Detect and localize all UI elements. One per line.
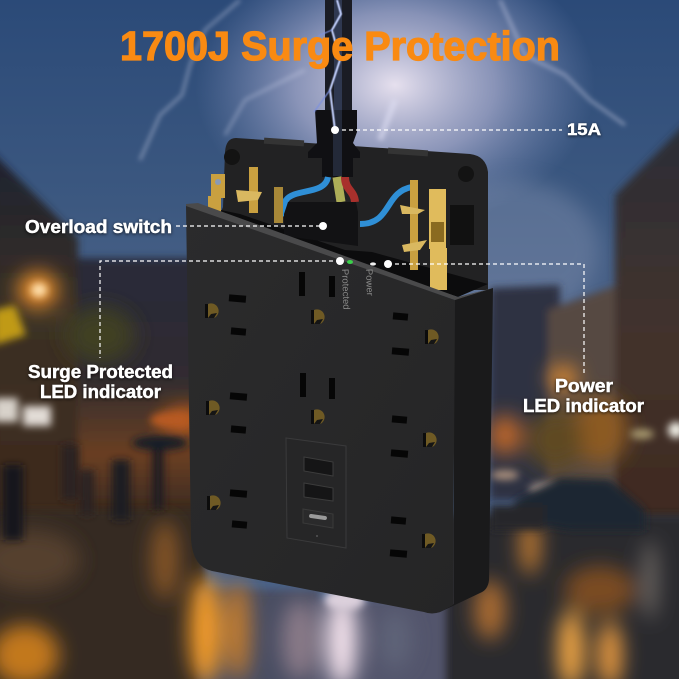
warm city lights and reflections <box>0 272 657 679</box>
callout: Surge Protected LED indicator: Surge Protected <box>28 362 173 382</box>
rear socket block <box>450 205 474 245</box>
USB-A port 2 <box>304 483 333 501</box>
main body: side face <box>438 288 493 613</box>
blurred buildings right <box>490 120 679 520</box>
power cord <box>308 0 360 177</box>
blurred buildings left <box>0 150 203 520</box>
right terminals <box>400 180 447 290</box>
callout: Overload switch <box>25 217 327 237</box>
callout: Power LED indicator: LED indicator <box>523 396 644 416</box>
white LED <box>370 262 376 266</box>
title: 1700J Surge Protection <box>120 23 560 69</box>
callout: Power LED indicator <box>384 260 644 416</box>
ground wire <box>337 177 341 202</box>
overload switch <box>284 202 358 246</box>
sky glow <box>195 0 595 230</box>
interior floor of the open housing <box>186 204 488 297</box>
switch wire <box>360 187 412 224</box>
callout: Power LED indicator: Power <box>555 376 613 396</box>
pedestrians and umbrella <box>3 412 190 540</box>
callout: Surge Protected LED indicator: LED indicator <box>40 382 161 402</box>
USB-A port 1 <box>304 457 333 476</box>
back plate of the strip <box>190 138 488 290</box>
live wire <box>345 177 355 202</box>
callout: Overload switch: Overload switch <box>25 217 172 237</box>
callout: Surge Protected LED indicator <box>28 257 344 402</box>
green LED <box>347 260 353 264</box>
main body: top rim <box>186 203 493 300</box>
lightning bolts <box>140 0 625 160</box>
top clips <box>264 138 304 146</box>
neutral wire <box>282 177 328 216</box>
street <box>0 510 679 679</box>
USB charging panel <box>286 438 346 548</box>
outlet group: left column <box>205 294 247 529</box>
wiring and brass terminals <box>208 167 447 290</box>
USB-C port <box>303 509 333 528</box>
crisp highlights <box>0 283 679 610</box>
outlet group: middle column <box>299 272 335 424</box>
outlet group: right column <box>390 312 439 558</box>
left terminals <box>208 167 283 223</box>
label: Power: Power <box>363 269 375 296</box>
mounting screws <box>224 149 240 165</box>
parked cars <box>490 478 645 530</box>
main body: front face <box>186 206 455 614</box>
callout: 15A <box>331 120 601 139</box>
label: Protected: Protected <box>339 269 351 310</box>
callout: 15A: 15A <box>567 120 601 139</box>
LED indicator labels on device <box>339 269 375 310</box>
